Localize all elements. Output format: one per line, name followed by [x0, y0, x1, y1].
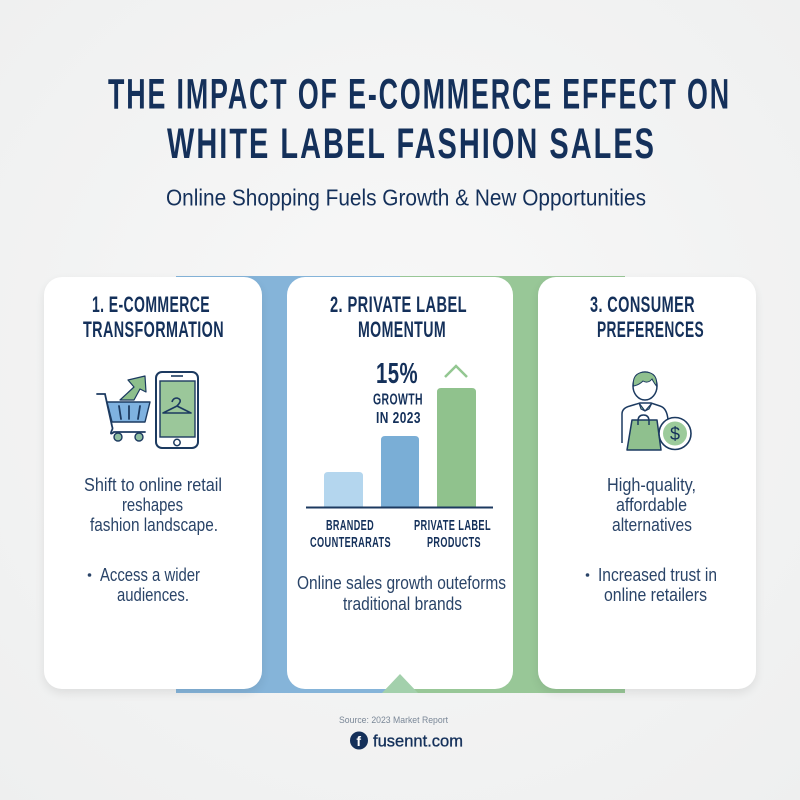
panel 2 description: traditional brands	[343, 594, 462, 614]
icon: shopping cart with arrow and phone	[97, 372, 198, 448]
growth callout: GROWTH	[373, 392, 423, 408]
chevron up	[445, 366, 467, 377]
bar: middle	[381, 436, 419, 507]
source note: Source: 2023 Market Report	[339, 715, 448, 726]
panel 1 bullet: audiences.	[117, 585, 189, 605]
axis label: private label: PRODUCTS	[427, 535, 481, 551]
panel 1 heading: TRANSFORMATION	[83, 317, 224, 342]
axis label: private label	[414, 518, 491, 551]
panel 2 description: Online sales growth outeforms	[297, 573, 506, 593]
panel 2 description	[297, 573, 506, 614]
subtitle: Online Shopping Fuels Growth & New Opportunities	[166, 184, 646, 210]
panel: e-commerce transformation	[44, 277, 262, 689]
panel 3 bullet	[586, 565, 717, 605]
panel: consumer preferences	[538, 277, 756, 689]
bar: private label	[437, 388, 476, 507]
panel 2 heading	[330, 292, 467, 342]
panel: private label momentum	[287, 277, 513, 689]
growth callout: 15%	[376, 358, 418, 390]
icon: shopper with bag and dollar coin: $	[670, 424, 680, 444]
panel 1 description: fashion landscape.	[90, 515, 218, 535]
growth callout	[373, 358, 423, 427]
panel 1 description: reshapes	[122, 495, 183, 515]
brand logo: f	[356, 733, 362, 749]
title	[108, 70, 731, 168]
background band: green	[400, 276, 625, 693]
panel 3 description: affordable	[616, 495, 687, 515]
panel 1 heading: 1. E-COMMERCE	[92, 292, 210, 317]
bar: branded	[324, 472, 363, 507]
panel 3 description: alternatives	[612, 515, 692, 535]
panel 3 heading: PREFERENCES	[597, 317, 704, 342]
growth callout: IN 2023	[376, 410, 421, 427]
panel 1 bullet: Access a wider	[100, 565, 200, 585]
brand logo: fusennt.com	[373, 732, 463, 750]
background band: blue	[176, 276, 400, 693]
panel 1 description	[84, 475, 222, 535]
panel 3 bullet: Increased trust in	[598, 565, 717, 585]
panel 3 description	[607, 475, 696, 535]
panel 3 heading: 3. CONSUMER	[590, 292, 695, 317]
axis label: branded	[310, 518, 391, 551]
arrow: pointer at bottom of middle panel	[382, 674, 418, 693]
panel 1 bullet	[88, 565, 200, 605]
panel 2 heading: MOMENTUM	[358, 317, 446, 342]
panel 3 bullet: online retailers	[604, 585, 707, 605]
bar chart	[306, 358, 493, 551]
axis label: private label: PRIVATE LABEL	[414, 518, 491, 534]
panel 2 heading: 2. PRIVATE LABEL	[330, 292, 467, 317]
panel 1 heading	[83, 292, 224, 342]
panel 3 description: High-quality,	[607, 475, 696, 495]
axis label: branded: BRANDED	[326, 518, 374, 534]
axis label: branded: COUNTERARATS	[310, 535, 391, 551]
icon: shopper with bag and dollar coin	[622, 372, 691, 450]
panel 3 heading	[590, 292, 704, 342]
panel 1 description: Shift to online retail	[84, 475, 222, 495]
